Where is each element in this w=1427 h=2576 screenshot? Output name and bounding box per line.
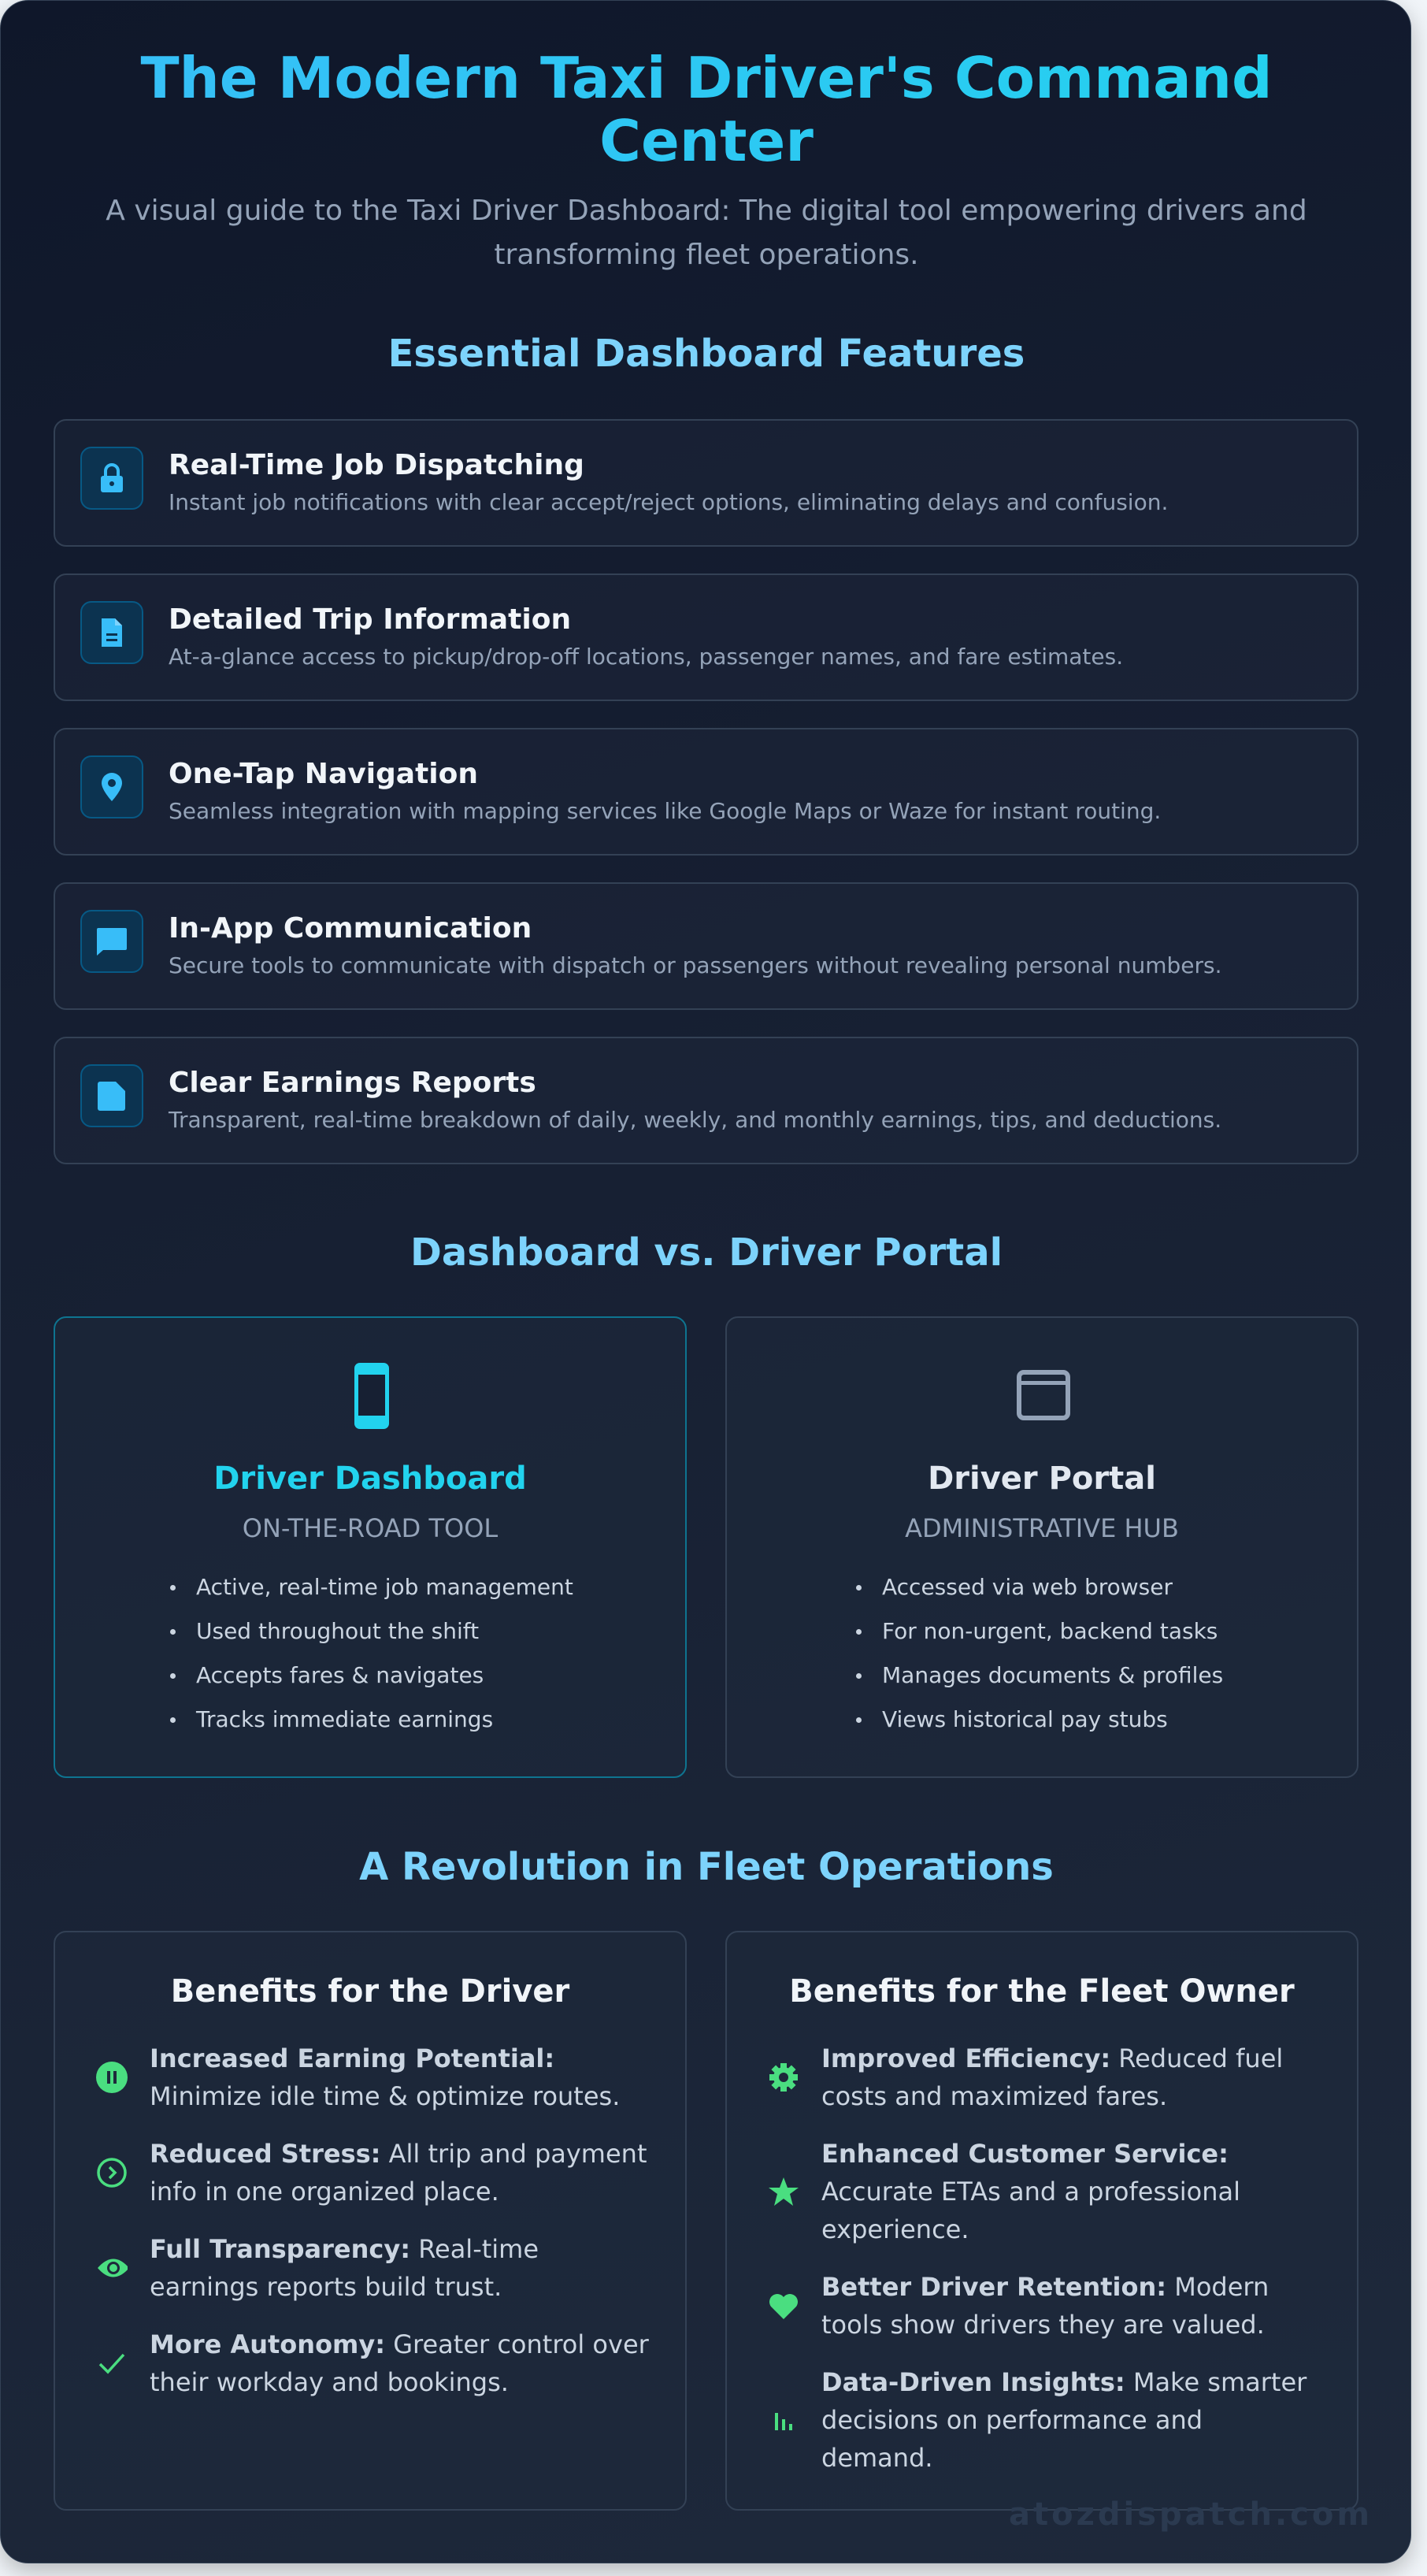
panel: driver portal [725, 1316, 1358, 1778]
title: The Modern Taxi Driver's Command [140, 45, 1273, 111]
item: retention: Better Driver Retention: Modern tools show drivers they are valued. [821, 2272, 1269, 2340]
heading: revolution: A Revolution in Fleet Operations [359, 1845, 1054, 1889]
subtitle: transforming fleet operations. [494, 239, 919, 271]
icon: document [80, 601, 143, 664]
panel: driver dashboard: Accepts fares & navigates [196, 1662, 484, 1688]
panel: driver benefits [54, 1931, 687, 2511]
icon: file [80, 1064, 143, 1127]
feature card: earnings [54, 1037, 1358, 1164]
subtitle [106, 195, 1307, 271]
feature card: earnings: Transparent, real-time breakdown of daily, weekly, and monthly earnings, tips, and deductions. [169, 1107, 1221, 1133]
panel: driver dashboard: Driver Dashboard [213, 1461, 527, 1497]
heading: comparison: Dashboard vs. Driver Portal [410, 1230, 1003, 1275]
heading: features: Essential Dashboard Features [388, 332, 1025, 376]
panel: driver portal: Accessed via web browser [882, 1574, 1173, 1600]
panel: driver portal: Driver Portal [928, 1461, 1156, 1497]
panel: driver portal: For non-urgent, backend tasks [882, 1618, 1218, 1644]
item: reduced stress: Reduced Stress: All trip and payment info in one organized place. [150, 2139, 647, 2207]
panel: driver dashboard: Used throughout the shift [196, 1618, 479, 1644]
feature card: dispatching [54, 419, 1358, 547]
panel: fleet owner benefits: Benefits for the Fleet Owner [789, 1973, 1295, 2010]
subtitle: A visual guide to the Taxi Driver Dashboard: The digital tool empowering drivers and [106, 195, 1307, 227]
icon: lock [80, 447, 143, 510]
icon: browser window [1017, 1370, 1070, 1420]
feature card: communication: In-App Communication [169, 912, 532, 945]
item: earning potential: Increased Earning Potential: Minimize idle time & optimize routes. [150, 2043, 620, 2111]
feature card: dispatching: Real-Time Job Dispatching [169, 449, 584, 481]
icon: chat [80, 910, 143, 973]
item: insights: Data-Driven Insights: Make smarter decisions on performance and demand. [821, 2367, 1307, 2473]
panel: driver benefits: Benefits for the Driver [171, 1973, 569, 2010]
panel: driver portal: Views historical pay stubs [882, 1706, 1168, 1732]
item: transparency: Full Transparency: Real-time earnings reports build trust. [150, 2234, 539, 2302]
feature card: trip info [54, 573, 1358, 701]
icon: map pin [80, 755, 143, 818]
panel: driver portal: ADMINISTRATIVE HUB [905, 1513, 1179, 1543]
panel: fleet owner benefits [725, 1931, 1358, 2511]
title [1, 46, 1412, 173]
item: customer service: Enhanced Customer Service: Accurate ETAs and a professional experience. [821, 2139, 1240, 2244]
icon: phone [354, 1363, 389, 1429]
feature card: navigation: Seamless integration with mapping services like Google Maps or Waze for instant routing. [169, 798, 1161, 824]
panel: driver dashboard: ON-THE-ROAD TOOL [243, 1513, 498, 1543]
feature card: trip info: At-a-glance access to pickup/drop-off locations, passenger names, and fare estimates. [169, 644, 1123, 670]
feature card: navigation [54, 728, 1358, 856]
feature card: navigation: One-Tap Navigation [169, 758, 478, 790]
title: Center [599, 108, 814, 174]
panel: driver portal: Manages documents & profiles [882, 1662, 1223, 1688]
panel: driver dashboard: Tracks immediate earnings [196, 1706, 493, 1732]
watermark: atozdispatch.com [1009, 2496, 1373, 2533]
feature card: trip info: Detailed Trip Information [169, 603, 571, 636]
feature card: communication: Secure tools to communicate with dispatch or passengers without revealing personal numbers. [169, 952, 1222, 978]
feature card: communication [54, 882, 1358, 1010]
panel: driver dashboard: Active, real-time job management [196, 1574, 573, 1600]
panel: driver dashboard [54, 1316, 687, 1778]
item: autonomy: More Autonomy: Greater control over their workday and bookings. [150, 2329, 649, 2397]
feature card: earnings: Clear Earnings Reports [169, 1067, 536, 1099]
item: efficiency: Improved Efficiency: Reduced fuel costs and maximized fares. [821, 2043, 1283, 2111]
feature card: dispatching: Instant job notifications with clear accept/reject options, eliminating delays and confusion. [169, 489, 1168, 515]
